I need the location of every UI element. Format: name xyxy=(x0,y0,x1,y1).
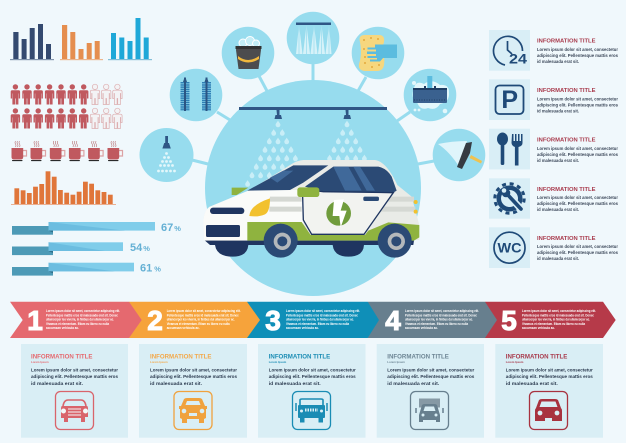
card 5 xyxy=(495,344,603,438)
info title 2: INFORMATION TITLE xyxy=(537,88,596,94)
windshield xyxy=(247,165,328,191)
door handle xyxy=(363,197,379,201)
card 5: INFORMATION TITLE xyxy=(506,354,567,360)
icon tile: service gear xyxy=(489,178,530,219)
circle icon: wiper xyxy=(433,129,485,181)
circle icon: sponge and hand xyxy=(352,27,404,79)
arrow banner step 5: 5 xyxy=(501,305,517,336)
rear lights xyxy=(414,200,418,204)
progress bar 54%: 54% xyxy=(130,242,150,254)
card 4: INFORMATION TITLE xyxy=(387,354,449,360)
arrow banner step 1 xyxy=(10,302,142,338)
info title 3 xyxy=(537,138,619,163)
front wheel xyxy=(264,224,298,258)
card 4: Lorem Ipsum xyxy=(387,360,405,364)
circle icon: shower xyxy=(140,128,194,182)
headlight xyxy=(249,198,270,216)
circle icon: foam brush xyxy=(404,69,456,121)
icon tile: parking: P xyxy=(501,86,518,114)
hood and front xyxy=(203,190,303,240)
card 3: Lorem Ipsum xyxy=(269,360,287,364)
info title 5 xyxy=(537,236,619,261)
arrow banner step 4: 4 xyxy=(385,305,401,336)
card 2: INFORMATION TITLE xyxy=(150,354,212,360)
icon tile: restaurant xyxy=(489,129,530,169)
progress bar 61%: 61 % xyxy=(140,262,161,274)
green lower panel xyxy=(247,222,419,241)
card 2: Lorem Ipsum xyxy=(150,360,168,364)
card 2 xyxy=(139,344,247,438)
arrow banner step 2: 2 xyxy=(147,305,163,336)
arrow banner step 3 xyxy=(247,302,379,338)
central circle xyxy=(205,80,421,296)
icon tile: 24 hours xyxy=(489,30,530,71)
card 1: INFORMATION TITLE xyxy=(31,354,92,360)
bar chart: navy xyxy=(10,24,54,60)
info title 1 xyxy=(537,39,619,64)
circle icon: rotating brushes xyxy=(170,69,222,121)
progress bar 67% xyxy=(12,222,181,235)
connectors between circles and hub xyxy=(192,62,434,164)
circle icon: sprinkler xyxy=(287,12,339,64)
icon tile: 24 hours: 24 xyxy=(509,50,527,66)
arrow banner step 3: 3 xyxy=(265,305,281,336)
water drops: left nozzle xyxy=(245,121,298,187)
circle icon: bucket with foam xyxy=(222,27,274,79)
info title 3: INFORMATION TITLE xyxy=(537,138,596,144)
info title 2 xyxy=(537,88,619,114)
rear wheel xyxy=(378,224,412,258)
icon tile: WC: WC xyxy=(498,240,522,256)
card 1 xyxy=(21,344,128,438)
progress bar 67%: 67% xyxy=(161,222,181,234)
side window xyxy=(305,167,397,193)
arrow banner step 5 xyxy=(485,302,616,338)
pictogram: people rows xyxy=(11,84,122,128)
card 1: Lorem Ipsum xyxy=(31,360,49,364)
spray rail and nozzles xyxy=(239,107,387,119)
info title 4 xyxy=(537,187,619,212)
door xyxy=(303,189,393,234)
arrow banner step 4 xyxy=(368,302,497,338)
arrow banner step 2 xyxy=(129,302,260,338)
side stripes xyxy=(269,197,415,212)
info title 5: INFORMATION TITLE xyxy=(537,236,596,242)
progress bar 54% xyxy=(12,242,150,255)
card 5: Lorem Ipsum xyxy=(506,360,524,364)
arrow banner step 1: 1 xyxy=(27,305,43,336)
progress bar 61% xyxy=(12,262,161,276)
car xyxy=(203,160,419,258)
bar chart: orange xyxy=(60,25,103,60)
icon tile: parking xyxy=(489,79,530,120)
car body xyxy=(203,160,419,243)
icon tile: WC xyxy=(489,227,530,268)
bumpers under car xyxy=(215,245,364,257)
water drops: right nozzle xyxy=(327,121,367,161)
card 3 xyxy=(258,344,366,438)
far-side mirror xyxy=(232,188,248,195)
pictogram: coffee cups xyxy=(12,141,122,161)
bar chart: blue xyxy=(108,18,152,60)
card 3: INFORMATION TITLE xyxy=(269,354,330,360)
card 4 xyxy=(377,344,484,438)
info title 1: INFORMATION TITLE xyxy=(537,39,596,45)
histogram: orange xyxy=(11,171,116,205)
info title 4: INFORMATION TITLE xyxy=(537,187,596,193)
mirror xyxy=(297,187,319,197)
sill xyxy=(205,241,414,245)
logo xyxy=(326,199,351,227)
grille xyxy=(210,208,244,214)
